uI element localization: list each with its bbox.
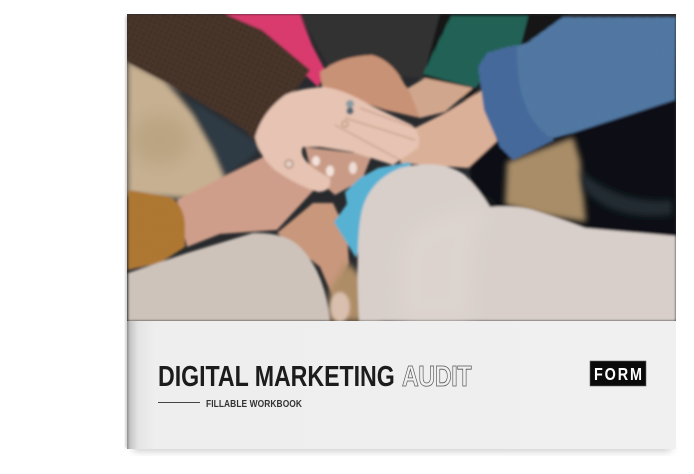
blue scrunchie xyxy=(334,162,412,258)
title outline word: AUDIT xyxy=(402,359,472,393)
subtitle: FILLABLE WORKBOOK xyxy=(206,398,302,410)
logo: FORM: FORM xyxy=(594,365,642,384)
drop shadow xyxy=(133,443,671,451)
dark background top xyxy=(300,14,460,80)
cover photo: stacked hands xyxy=(127,14,676,322)
back hand xyxy=(320,55,425,118)
wrist arm xyxy=(277,203,349,300)
brown sleeve xyxy=(127,14,310,145)
green sleeve xyxy=(423,16,528,88)
right hand xyxy=(400,90,497,168)
pale finger xyxy=(330,292,350,322)
left sleeve xyxy=(128,233,330,321)
sleeve shading xyxy=(399,207,490,321)
logo: FORM xyxy=(590,361,646,386)
mustard cuff xyxy=(128,190,185,270)
blue sleeve xyxy=(505,17,676,142)
fur lower xyxy=(328,262,381,321)
finger shading xyxy=(335,108,415,160)
dark blue gap xyxy=(188,98,260,177)
rings xyxy=(285,100,354,168)
white panel xyxy=(127,321,676,449)
fur background right xyxy=(505,137,586,222)
rule line xyxy=(158,402,200,403)
blue cuff xyxy=(478,45,554,160)
strap detail xyxy=(580,170,672,216)
right white sleeve xyxy=(358,164,676,321)
lower hand under green sleeve xyxy=(408,78,473,118)
left edge shadow xyxy=(125,16,128,448)
dark background right xyxy=(470,95,676,240)
fingers with nails xyxy=(305,147,372,195)
brochure mockup xyxy=(124,14,676,455)
title: DIGITAL MARKETING xyxy=(158,359,395,393)
nail details xyxy=(312,156,320,166)
pink sleeve xyxy=(225,14,326,87)
fur background left xyxy=(127,60,228,200)
left arm xyxy=(177,157,314,247)
main hand xyxy=(255,87,419,192)
